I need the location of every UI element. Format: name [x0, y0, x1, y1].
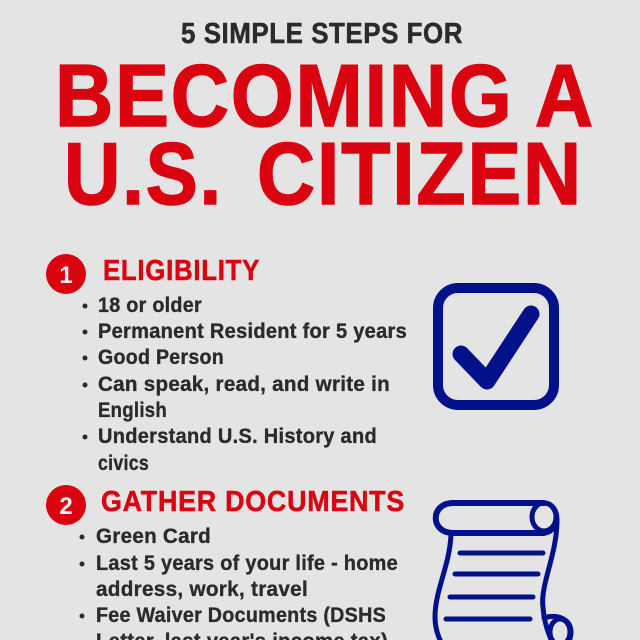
step 2 list: address, work, travel	[96, 577, 308, 601]
step 1 list: Can speak, read, and write in	[98, 372, 390, 396]
step 1 list: English	[98, 398, 167, 422]
subtitle line: 5 SIMPLE STEPS FOR	[181, 18, 463, 50]
step 2 list: Last 5 years of your life - home	[96, 551, 398, 575]
step 2 list	[80, 524, 398, 640]
step 2 list: Fee Waiver Documents (DSHS	[96, 603, 386, 627]
panel: step 1 eligibility	[46, 254, 554, 475]
step 2 number badge	[46, 485, 86, 525]
step 1 heading: ELIGIBILITY	[103, 255, 260, 287]
title	[55, 18, 595, 223]
step 1 list	[82, 293, 407, 475]
step 1 list: Understand U.S. History and	[98, 424, 377, 448]
title line two: U.S.	[64, 124, 223, 223]
icon: check box	[438, 288, 554, 405]
title line two	[64, 124, 583, 223]
step 2 heading: GATHER DOCUMENTS	[101, 486, 405, 518]
step 2 number badge: 2	[59, 493, 73, 520]
title line two: CITIZEN	[257, 124, 583, 223]
title line one: BECOMING A	[55, 46, 595, 145]
step 1 list: civics	[98, 451, 149, 475]
step 2 list: Green Card	[96, 524, 211, 548]
step 1 number badge	[46, 254, 86, 294]
step 1 number badge: 1	[59, 262, 73, 289]
step 1 list: Permanent Resident for 5 years	[98, 319, 407, 343]
panel: step 2 gather documents	[46, 485, 571, 640]
step 1 list: Good Person	[98, 345, 224, 369]
step 1 list: 18 or older	[98, 293, 202, 317]
icon: document scroll	[435, 503, 571, 640]
